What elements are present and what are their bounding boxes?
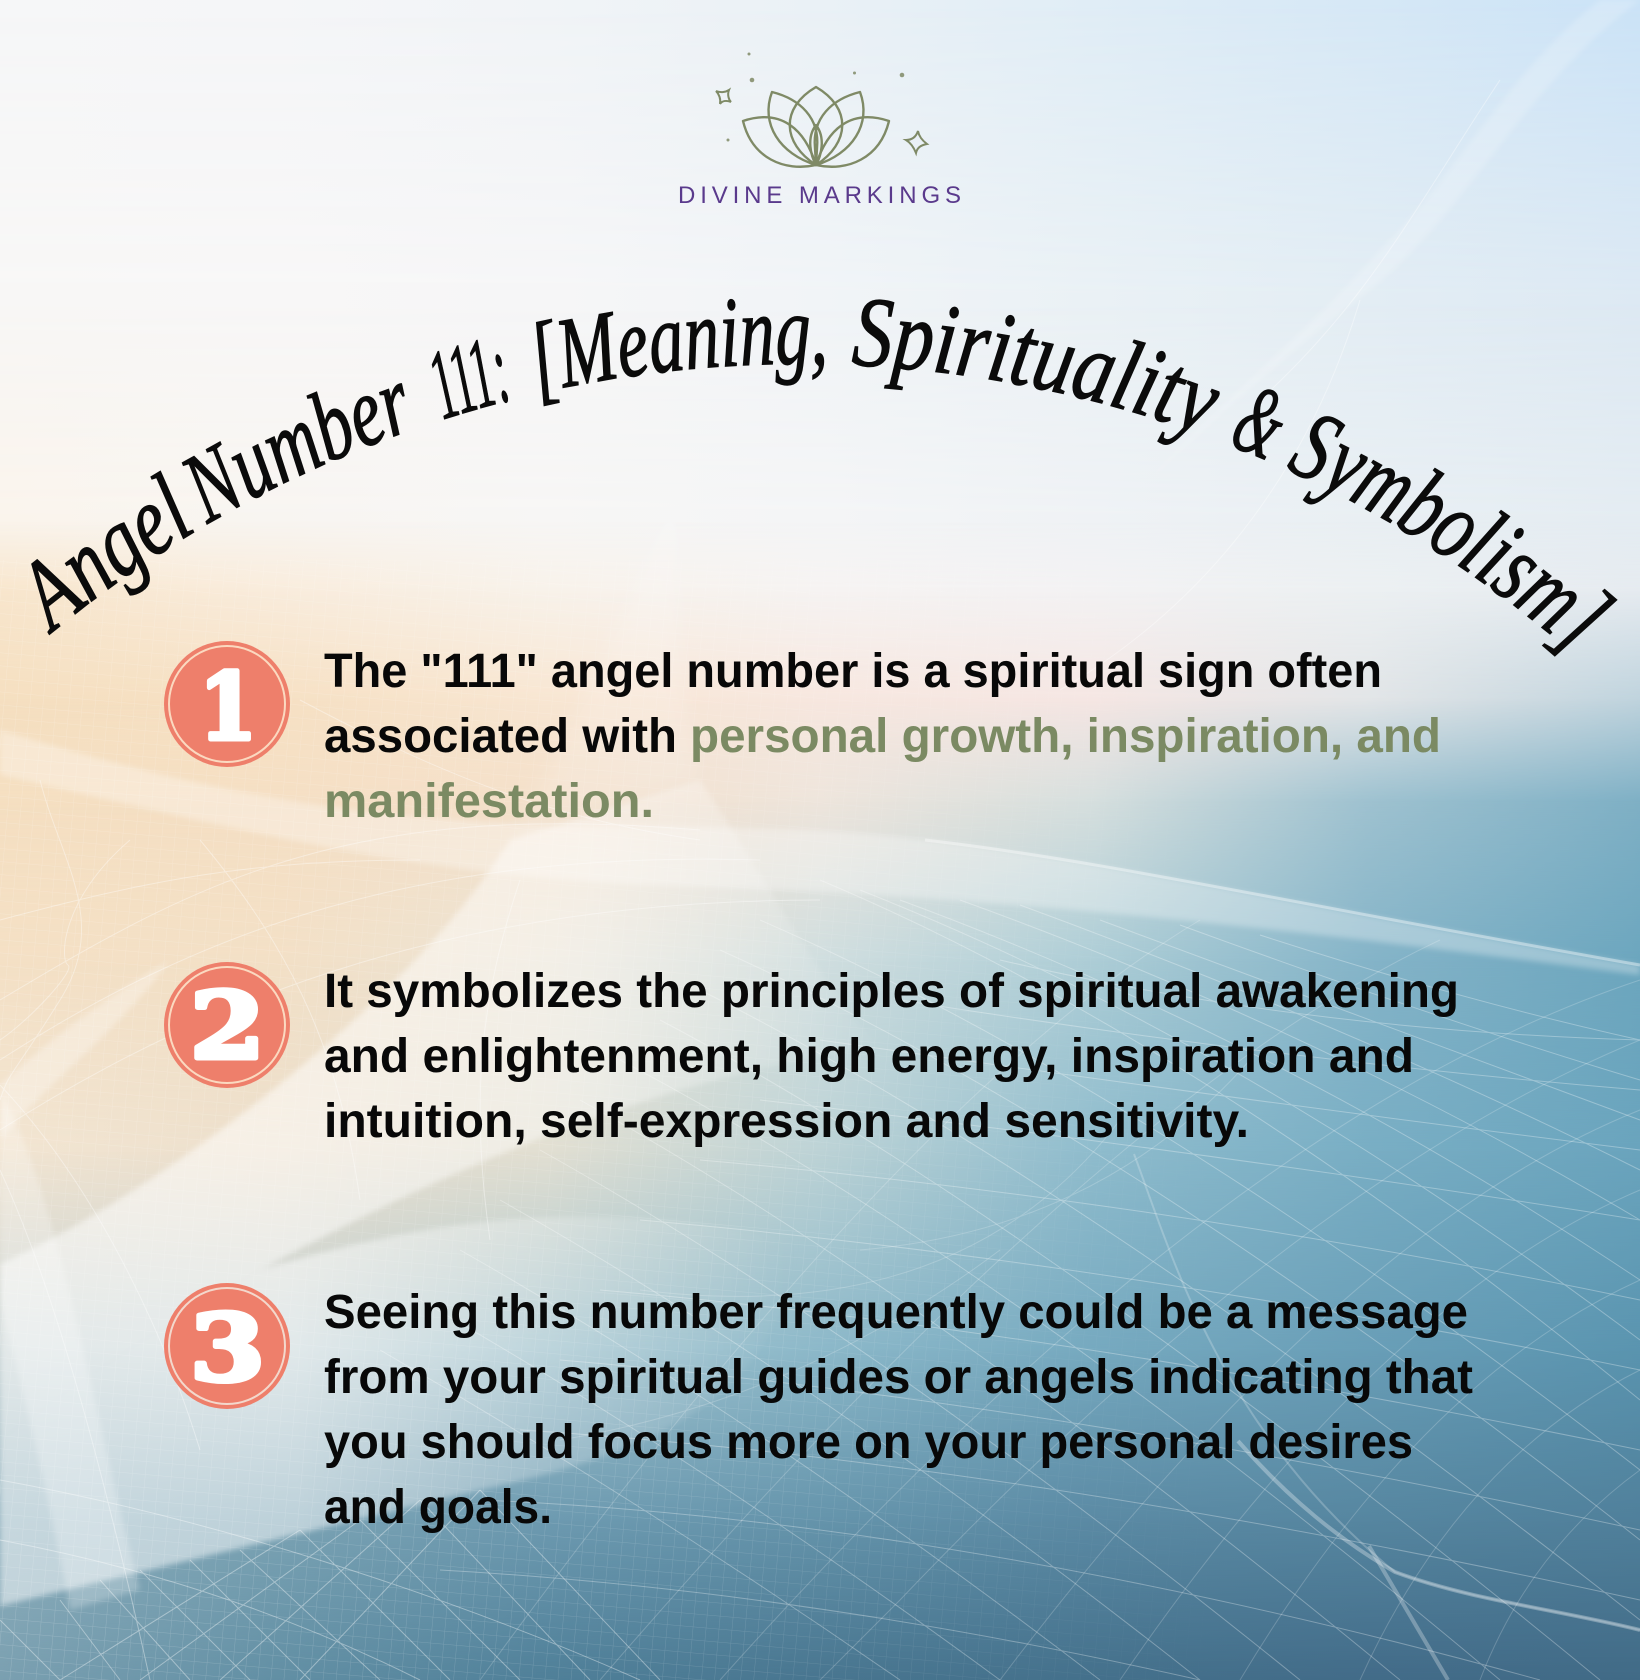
text block 1: associated with xyxy=(324,710,677,763)
text block 1: The "111" angel number is a spiritual sign often xyxy=(324,645,1382,698)
number badge 2 xyxy=(164,962,290,1088)
panel: point 1 xyxy=(164,641,1441,828)
text block 3: you should focus more on your personal desires xyxy=(324,1416,1413,1469)
number badge 1 xyxy=(164,641,290,767)
logo wordmark: DIVINE MARKINGS xyxy=(678,182,961,209)
text block 2 xyxy=(324,965,1459,1148)
title: curved heading: & xyxy=(1233,389,1284,460)
logo: Divine Markings xyxy=(678,52,961,209)
text block 3 xyxy=(324,1286,1473,1534)
text block 2: It symbolizes the principles of spiritual awakening xyxy=(324,965,1459,1018)
text block 3: Seeing this number frequently could be a message xyxy=(324,1286,1468,1339)
number badge 2: 2 xyxy=(190,972,265,1080)
panel: point 3 xyxy=(164,1283,1473,1534)
text block 1: manifestation. xyxy=(324,775,654,828)
text block 2: intuition, self-expression and sensitivity. xyxy=(324,1095,1249,1148)
text block 3: from your spiritual guides or angels indicating that xyxy=(324,1351,1473,1404)
icon: lotus flower xyxy=(743,87,889,167)
number badge 3: 3 xyxy=(190,1294,265,1402)
title: curved heading: 111: xyxy=(432,340,508,420)
text block 1 xyxy=(324,645,1441,828)
title: curved heading: Symbolism] xyxy=(1287,416,1618,657)
title: curved heading xyxy=(31,298,1618,657)
panel: point 2 xyxy=(164,962,1459,1148)
text block 2: and enlightenment, high energy, inspiration and xyxy=(324,1030,1414,1083)
text block 1: personal growth, inspiration, and xyxy=(690,710,1441,763)
text block 3: and goals. xyxy=(324,1481,552,1534)
title: curved heading: Angel xyxy=(31,470,194,636)
title: curved heading: Number xyxy=(182,383,405,525)
title: curved heading: Spirituality xyxy=(852,299,1220,445)
title: curved heading: [Meaning, xyxy=(536,298,824,406)
number badge 3 xyxy=(164,1283,290,1409)
icon: sparkles and dots xyxy=(716,52,927,153)
number badge 1: 1 xyxy=(199,653,257,761)
